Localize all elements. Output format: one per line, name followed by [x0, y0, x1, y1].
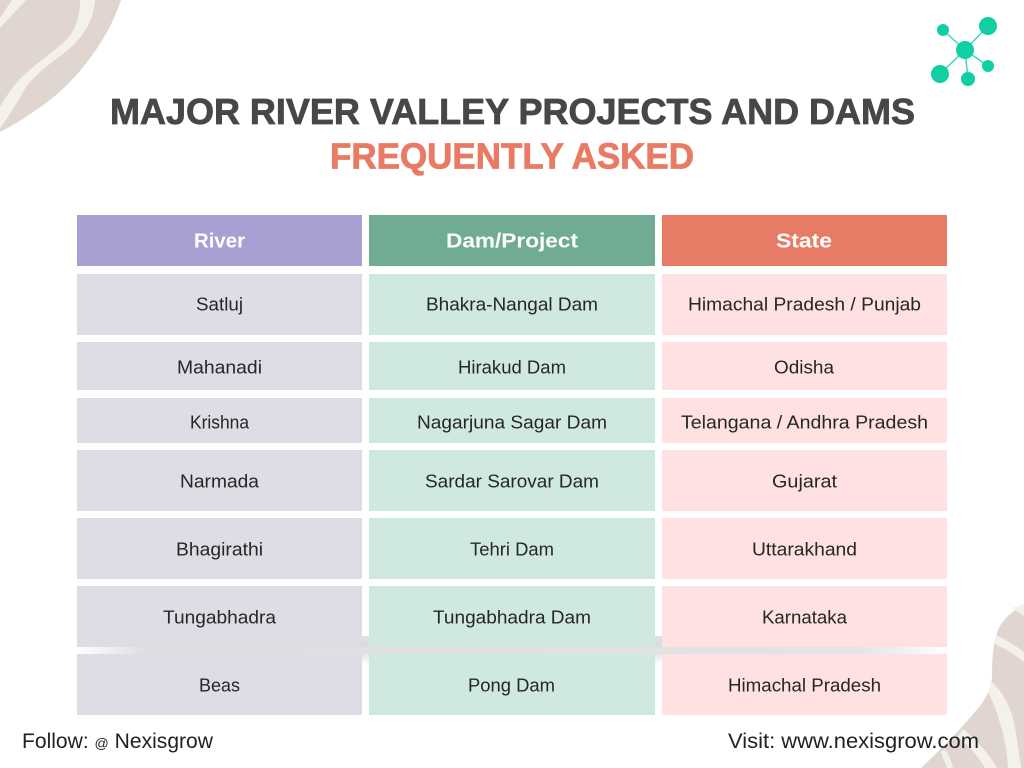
footer: follow handle: Follow: @ Nexisgrow	[22, 730, 214, 753]
row: Krishna: Krishna	[190, 412, 250, 432]
row: Narmada: Narmada	[180, 470, 260, 492]
row: Mahanadi: Hirakud Dam	[458, 356, 566, 378]
row: Krishna: Telangana / Andhra Pradesh	[681, 412, 928, 432]
row: Beas: Pong Dam	[468, 674, 555, 696]
row: Beas	[77, 654, 947, 715]
row: Bhagirathi: Tehri Dam	[470, 538, 554, 560]
row: Tungabhadra: Karnataka	[762, 606, 848, 628]
decorative blob: bottom right	[921, 604, 1024, 768]
title	[110, 91, 915, 176]
row: Krishna: Nagarjuna Sagar Dam	[417, 412, 607, 432]
decorative blob: top left	[0, 0, 121, 132]
row: Mahanadi	[77, 342, 947, 390]
row: Mahanadi: Mahanadi	[177, 356, 262, 378]
title line 2: FREQUENTLY ASKED	[330, 136, 694, 176]
row: Tungabhadra: Tungabhadra Dam	[433, 606, 591, 628]
row: Tungabhadra	[77, 586, 947, 647]
header row: Dam/Project	[446, 230, 578, 252]
header row	[77, 215, 947, 266]
header row: State	[776, 230, 832, 252]
title line 1: MAJOR RIVER VALLEY PROJECTS AND DAMS	[110, 91, 915, 132]
row: Satluj: Satluj	[196, 294, 243, 314]
row: Mahanadi: Odisha	[774, 356, 835, 378]
row: Bhagirathi: Uttarakhand	[752, 538, 857, 560]
shadow band behind last table row	[77, 636, 947, 665]
table	[77, 215, 947, 715]
row: Satluj: Bhakra-Nangal Dam	[426, 294, 598, 314]
row: Narmada	[77, 450, 947, 511]
row: Tungabhadra: Tungabhadra	[163, 606, 277, 628]
row: Bhagirathi	[77, 518, 947, 579]
row: Krishna	[77, 398, 947, 443]
row: Satluj: Himachal Pradesh / Punjab	[688, 294, 921, 314]
row: Narmada: Sardar Sarovar Dam	[425, 470, 599, 492]
footer: website: Visit: www.nexisgrow.com	[728, 730, 979, 753]
icon: network logo	[931, 17, 997, 86]
row: Narmada: Gujarat	[772, 470, 837, 492]
row: Bhagirathi: Bhagirathi	[176, 538, 263, 560]
header row: River	[194, 230, 245, 252]
row: Satluj	[77, 274, 947, 335]
row: Beas: Beas	[199, 674, 240, 696]
row: Beas: Himachal Pradesh	[728, 674, 881, 696]
